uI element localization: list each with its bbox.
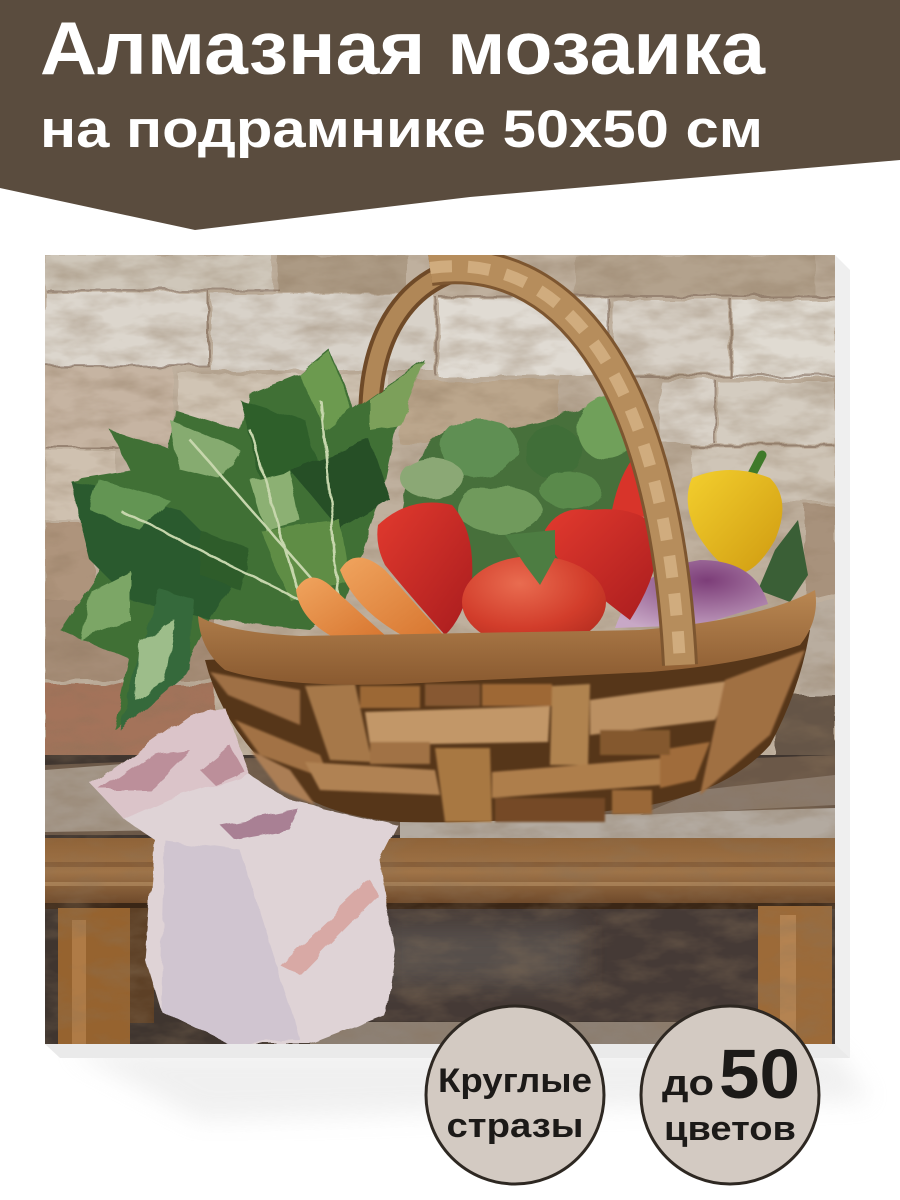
brick wall (45, 255, 835, 775)
leaves right of pepper (758, 520, 808, 602)
badge: round rhinestones: Круглые (438, 1062, 592, 1100)
greens behind the basket (400, 396, 640, 590)
badge: round rhinestones (426, 1006, 604, 1184)
canvas mottled texture (45, 255, 835, 1044)
badge: up to 50 colours: 50 (719, 1035, 800, 1113)
painting: vegetable basket on wooden bench (45, 255, 835, 1044)
basket rim (198, 590, 816, 685)
red cabbage (615, 560, 768, 628)
badge: up to 50 colours: до (662, 1062, 714, 1103)
badge: up to 50 colours: цветов (664, 1110, 796, 1148)
tomato (462, 530, 606, 633)
header banner (0, 0, 900, 230)
badge: up to 50 colours (641, 1006, 819, 1184)
wicker basket (198, 590, 816, 822)
carrots (296, 558, 445, 638)
red peppers (377, 450, 658, 635)
bench (45, 755, 835, 1044)
yellow pepper (688, 455, 782, 574)
basket handle: left strand (358, 268, 452, 405)
title: Алмазная мозаика (40, 6, 766, 90)
bunch of leafy greens (60, 350, 425, 730)
badge: round rhinestones: стразы (446, 1107, 584, 1145)
basket handle: braided right strand in front (430, 266, 680, 665)
canvas side and drop shadow (45, 255, 870, 1120)
tea towel (92, 708, 398, 1044)
subtitle: на подрамнике 50х50 см (40, 100, 763, 159)
